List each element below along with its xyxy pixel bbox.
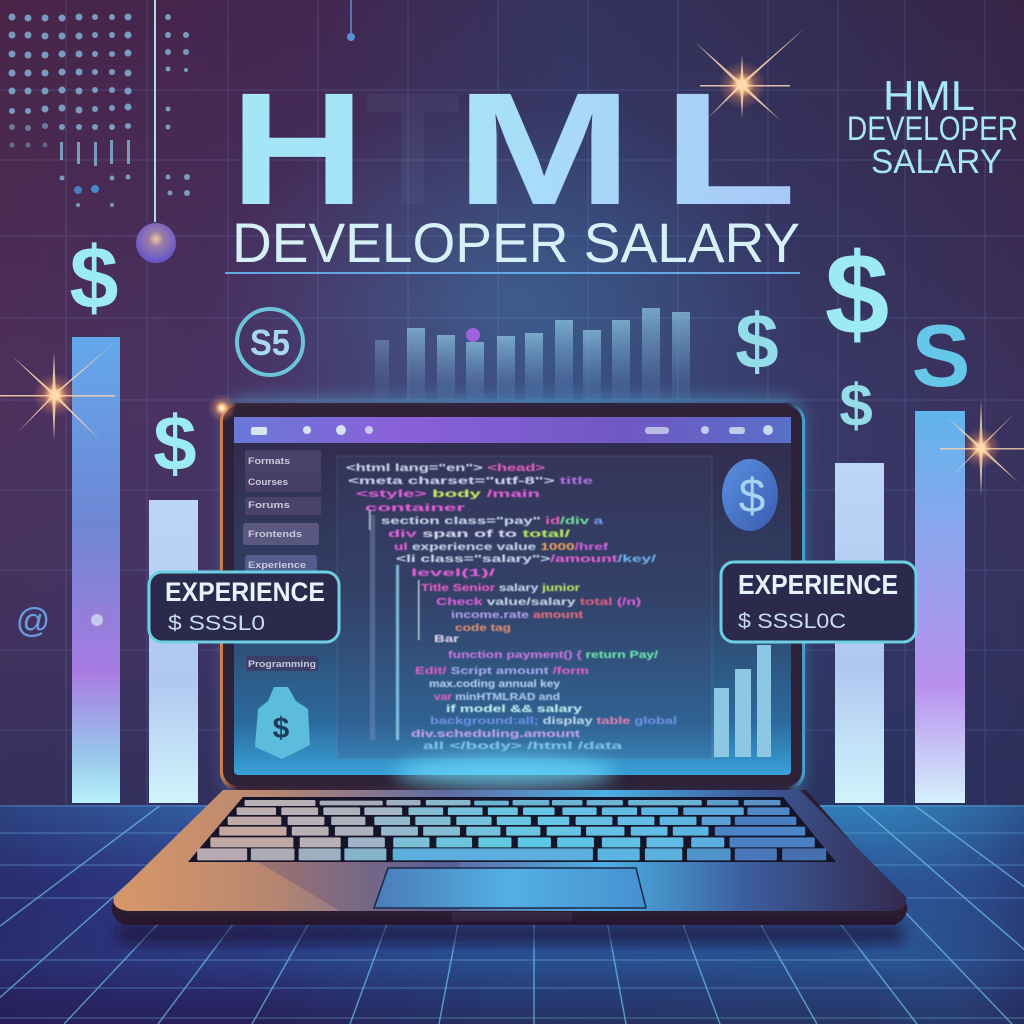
screen dollar coin icon: $ (739, 470, 765, 523)
code panel: function payment() { return Pay/ (448, 650, 658, 661)
dollar signs: $ (70, 228, 118, 327)
small corner title (847, 72, 1018, 181)
sidebar menu (243, 450, 321, 671)
code panel: if model && salary (446, 704, 583, 715)
code panel: income.rate amount (451, 610, 584, 621)
laptop screen glow (226, 398, 802, 798)
callout: left experience: EXPERIENCE (165, 577, 325, 607)
trackpad (374, 868, 646, 908)
code panel: <style> body /main (356, 489, 540, 500)
floor (0, 805, 1024, 1024)
bezel inner (223, 406, 802, 786)
laptop (112, 398, 907, 925)
laptop base (112, 790, 907, 925)
screen mini bar chart (714, 645, 771, 757)
hanging pin (347, 0, 355, 41)
code panel: Title Senior salary junior (421, 583, 580, 594)
dollar signs: $ (735, 297, 779, 385)
salary bars right (835, 411, 965, 803)
code panel: var minHTMLRAD and (434, 692, 560, 703)
sidebar menu: Formats (248, 456, 290, 466)
wall grid lines (0, 0, 1024, 810)
dollar signs: $ (825, 229, 889, 359)
dot matrix decoration (8, 14, 190, 207)
laptop corner flare (208, 394, 236, 422)
circular S5 badge (237, 309, 303, 375)
code panel: level(1)/ (411, 568, 495, 579)
sidebar menu: Frontends (248, 529, 302, 539)
main title: HTML (230, 59, 797, 238)
salary bars left (72, 337, 198, 803)
sidebar menu: Programming (248, 659, 316, 669)
sparkle: right (940, 400, 1024, 496)
code panel: code tag (455, 623, 511, 634)
title underline (225, 272, 800, 274)
sparkle: top right (695, 28, 805, 120)
callout: left experience: $ SSSL0 (168, 612, 265, 635)
background faded bar chart (375, 308, 690, 400)
main title: developer salary: DEVELOPER SALARY (232, 211, 800, 274)
code panel: <html lang="en"> <head> (346, 463, 545, 474)
keys (197, 800, 826, 860)
code panel: <meta charset="utf-8"> title (348, 476, 594, 487)
main title: HTML: L (662, 59, 797, 238)
main title: HTML: M (455, 59, 633, 238)
code panel: container (365, 503, 465, 514)
sidebar menu: Forums (248, 500, 290, 510)
code panel: <li class="salary"> /amount /key/ (396, 554, 656, 565)
left small icons: @ (16, 602, 50, 640)
left small icons (16, 602, 112, 640)
callout: right experience: EXPERIENCE (738, 569, 898, 600)
laptop shadow on floor (118, 924, 903, 944)
code gutter (369, 510, 420, 740)
code panel: max.coding annual key (429, 679, 561, 690)
small corner title: SALARY (871, 143, 1002, 181)
main title: HTML: H (230, 59, 365, 238)
dollar signs (70, 228, 970, 487)
callout: left experience (149, 572, 339, 642)
screen money bag icon (255, 687, 310, 759)
screen dollar coin icon (722, 459, 778, 531)
dollar signs: $ (839, 372, 873, 439)
code panel: background:all; display table global (430, 716, 677, 727)
code panel: div.scheduling.amount (411, 729, 581, 740)
code panel (337, 456, 712, 759)
code panel: ul experience value 1000 /href (394, 542, 609, 553)
circular S5 badge: S5 (250, 322, 290, 363)
screen header bar (234, 417, 791, 443)
hanging pendant ball (136, 0, 176, 263)
dollar signs: S (912, 306, 970, 405)
code panel: Check value/salary total (/n) (436, 597, 641, 608)
code panel: section class="pay" id /div a (381, 516, 604, 527)
callout: right experience (721, 562, 916, 642)
code panel: div span of to total/ (388, 529, 570, 540)
screen money bag icon: $ (273, 712, 290, 745)
dollar signs: $ (153, 399, 197, 487)
callout: right experience: $ SSSL0C (738, 610, 846, 633)
code panel: all </body> /html /data (423, 741, 623, 752)
small corner title: HML (883, 72, 975, 119)
code panel: Edit/ Script amount /form (415, 666, 589, 677)
screen (234, 417, 791, 775)
main title: HTML: T (365, 59, 460, 238)
sparkle: left (0, 345, 115, 440)
laptop bezel (220, 403, 805, 790)
keyboard well (188, 797, 836, 862)
sidebar menu: Courses (248, 477, 288, 487)
bottom screen glow (395, 756, 615, 788)
sidebar menu: Experience (248, 560, 306, 570)
code panel: Bar (434, 634, 459, 645)
